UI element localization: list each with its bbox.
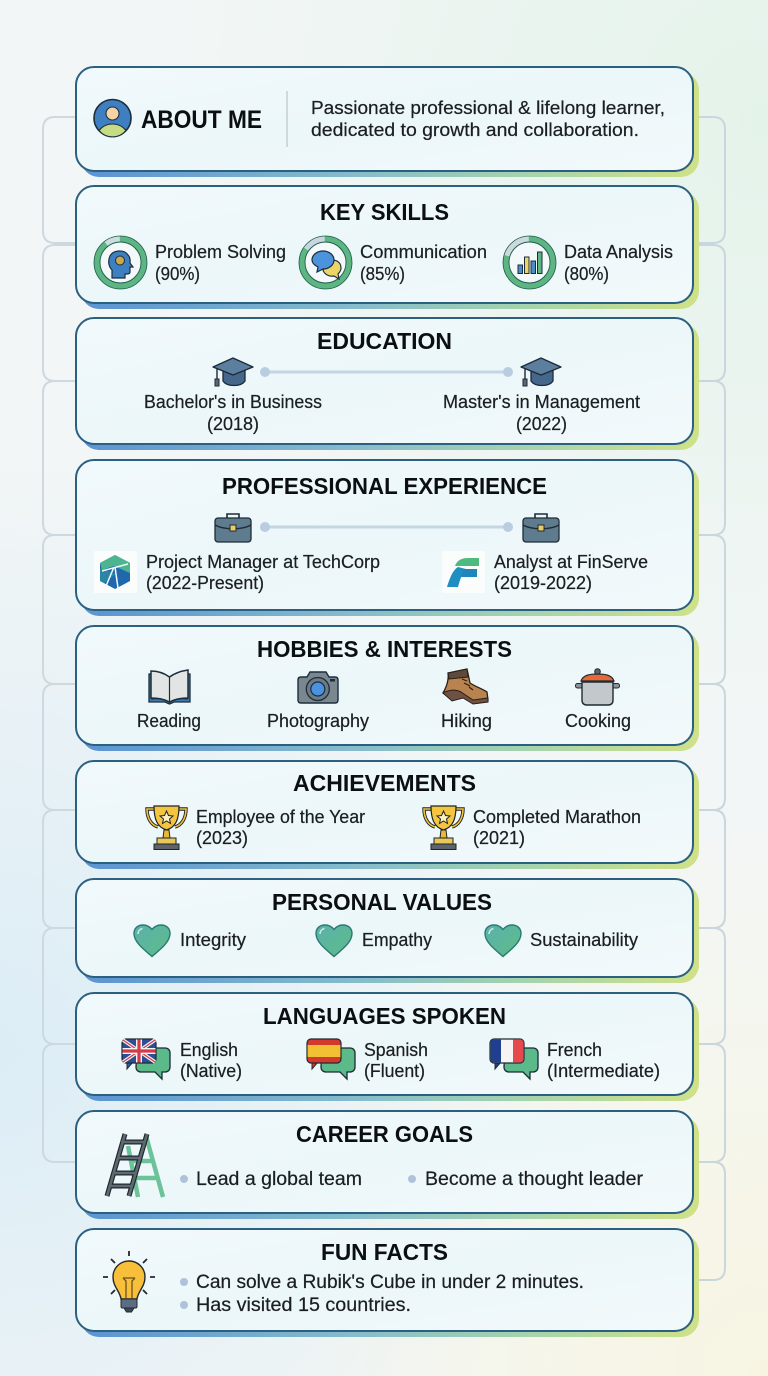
- text: techcorp role: [146, 552, 380, 593]
- education timeline: [260, 367, 513, 377]
- language: english: English: [180, 1040, 238, 1060]
- panel: hobbies and interests: [76, 626, 699, 751]
- text: finserve role: (2019-2022): [494, 573, 592, 593]
- skill: communication: (85%): [360, 264, 405, 284]
- value: sustainability: Sustainability: [530, 930, 638, 950]
- heading: professional experience: PROFESSIONAL EXPERIENCE: [222, 473, 547, 499]
- hobby: reading: [137, 670, 201, 731]
- language: spanish: (Fluent): [364, 1061, 425, 1081]
- text: about me description: dedicated to growth and collaboration.: [311, 119, 639, 140]
- education: bachelor: (2018): [207, 414, 259, 434]
- skill: data analysis: (80%): [564, 264, 609, 284]
- icon: briefcase left: [215, 514, 251, 542]
- icon: light bulb: [103, 1251, 155, 1312]
- value: empathy: Empathy: [362, 930, 432, 950]
- skill: problem solving: Problem Solving: [155, 242, 286, 262]
- achievement: completed marathon: Completed Marathon: [473, 807, 641, 827]
- value: integrity: [134, 925, 246, 956]
- panel: fun facts: [76, 1229, 699, 1337]
- heading: about me: ABOUT ME: [141, 106, 262, 134]
- hobby: hiking: [441, 669, 492, 731]
- language: french: [490, 1039, 660, 1081]
- language: english: [122, 1039, 242, 1081]
- education: bachelor: [144, 392, 322, 434]
- value: integrity: Integrity: [180, 930, 246, 950]
- achievement: completed marathon: [424, 806, 641, 850]
- value: sustainability: [485, 925, 638, 956]
- heading: languages spoken: LANGUAGES SPOKEN: [263, 1003, 506, 1029]
- achievement: employee of the year: Employee of the Year: [196, 807, 365, 827]
- experience timeline: [260, 522, 513, 532]
- language: french: French: [547, 1040, 602, 1060]
- language: spanish: [307, 1039, 428, 1081]
- language: spanish: Spanish: [364, 1040, 428, 1060]
- text: about me description: [311, 97, 665, 140]
- icon: ladder: [107, 1134, 163, 1197]
- heading: achievements: ACHIEVEMENTS: [293, 770, 476, 796]
- achievement: employee of the year: (2023): [196, 828, 248, 848]
- panel: about me: [76, 67, 699, 177]
- heading: education: EDUCATION: [317, 328, 452, 354]
- panel: professional experience: [76, 460, 699, 616]
- education: master: Master's in Management: [443, 392, 640, 412]
- heading: hobbies: HOBBIES & INTERESTS: [257, 636, 512, 662]
- icon: briefcase right: [523, 514, 559, 542]
- skill: communication: Communication: [360, 242, 487, 262]
- goal: become a thought leader: Become a thought leader: [425, 1169, 644, 1190]
- text: finserve role: [494, 552, 648, 593]
- icon: graduation cap left: [213, 358, 253, 386]
- hobby: reading: Reading: [137, 711, 201, 731]
- skill: data analysis: [503, 236, 673, 289]
- heading: personal values: PERSONAL VALUES: [272, 889, 492, 915]
- text: techcorp role: Project Manager at TechCorp: [146, 552, 380, 572]
- skill: communication: [299, 236, 487, 289]
- heading: fun facts: FUN FACTS: [321, 1239, 448, 1265]
- education: bachelor: Bachelor's in Business: [144, 392, 322, 412]
- logo: finserve: [442, 551, 485, 593]
- hobby: cooking: Cooking: [565, 711, 631, 731]
- heading: key skills: KEY SKILLS: [320, 199, 449, 225]
- fact: countries: Has visited 15 countries.: [196, 1295, 411, 1316]
- fact: rubik's cube: Can solve a Rubik's Cube in under 2 minutes.: [196, 1272, 584, 1293]
- hobby: photography: [267, 672, 369, 731]
- hobby: hiking: Hiking: [441, 711, 492, 731]
- logo: techcorp: [94, 551, 137, 593]
- panel: personal values: [76, 879, 699, 983]
- panel: education: [76, 318, 699, 450]
- skill: problem solving: (90%): [155, 264, 200, 284]
- icon: graduation cap right: [521, 358, 561, 386]
- text: about me description: Passionate professional & lifelong learner,: [311, 97, 665, 118]
- achievement: employee of the year: [147, 806, 365, 850]
- hobby: photography: Photography: [267, 711, 369, 731]
- skill: problem solving: [94, 236, 286, 289]
- value: empathy: [316, 925, 432, 956]
- panel: key skills: [76, 186, 699, 309]
- goal: lead a global team: Lead a global team: [196, 1169, 362, 1190]
- language: french: (Intermediate): [547, 1061, 660, 1081]
- panel: languages spoken: [76, 993, 699, 1101]
- connector brackets: right: [694, 117, 725, 1280]
- skill: data analysis: Data Analysis: [564, 242, 673, 262]
- panel: achievements: [76, 761, 699, 869]
- text: techcorp role: (2022-Present): [146, 573, 264, 593]
- hobby: cooking: [565, 669, 631, 731]
- achievement: completed marathon: (2021): [473, 828, 525, 848]
- text: finserve role: Analyst at FinServe: [494, 552, 648, 572]
- panel: career goals: [76, 1111, 699, 1219]
- icon: profile avatar: [94, 100, 131, 137]
- education: master: (2022): [516, 414, 567, 434]
- connector brackets: left: [43, 117, 76, 1162]
- education: master: [443, 392, 640, 434]
- heading: career goals: CAREER GOALS: [296, 1121, 473, 1147]
- language: english: (Native): [180, 1061, 242, 1081]
